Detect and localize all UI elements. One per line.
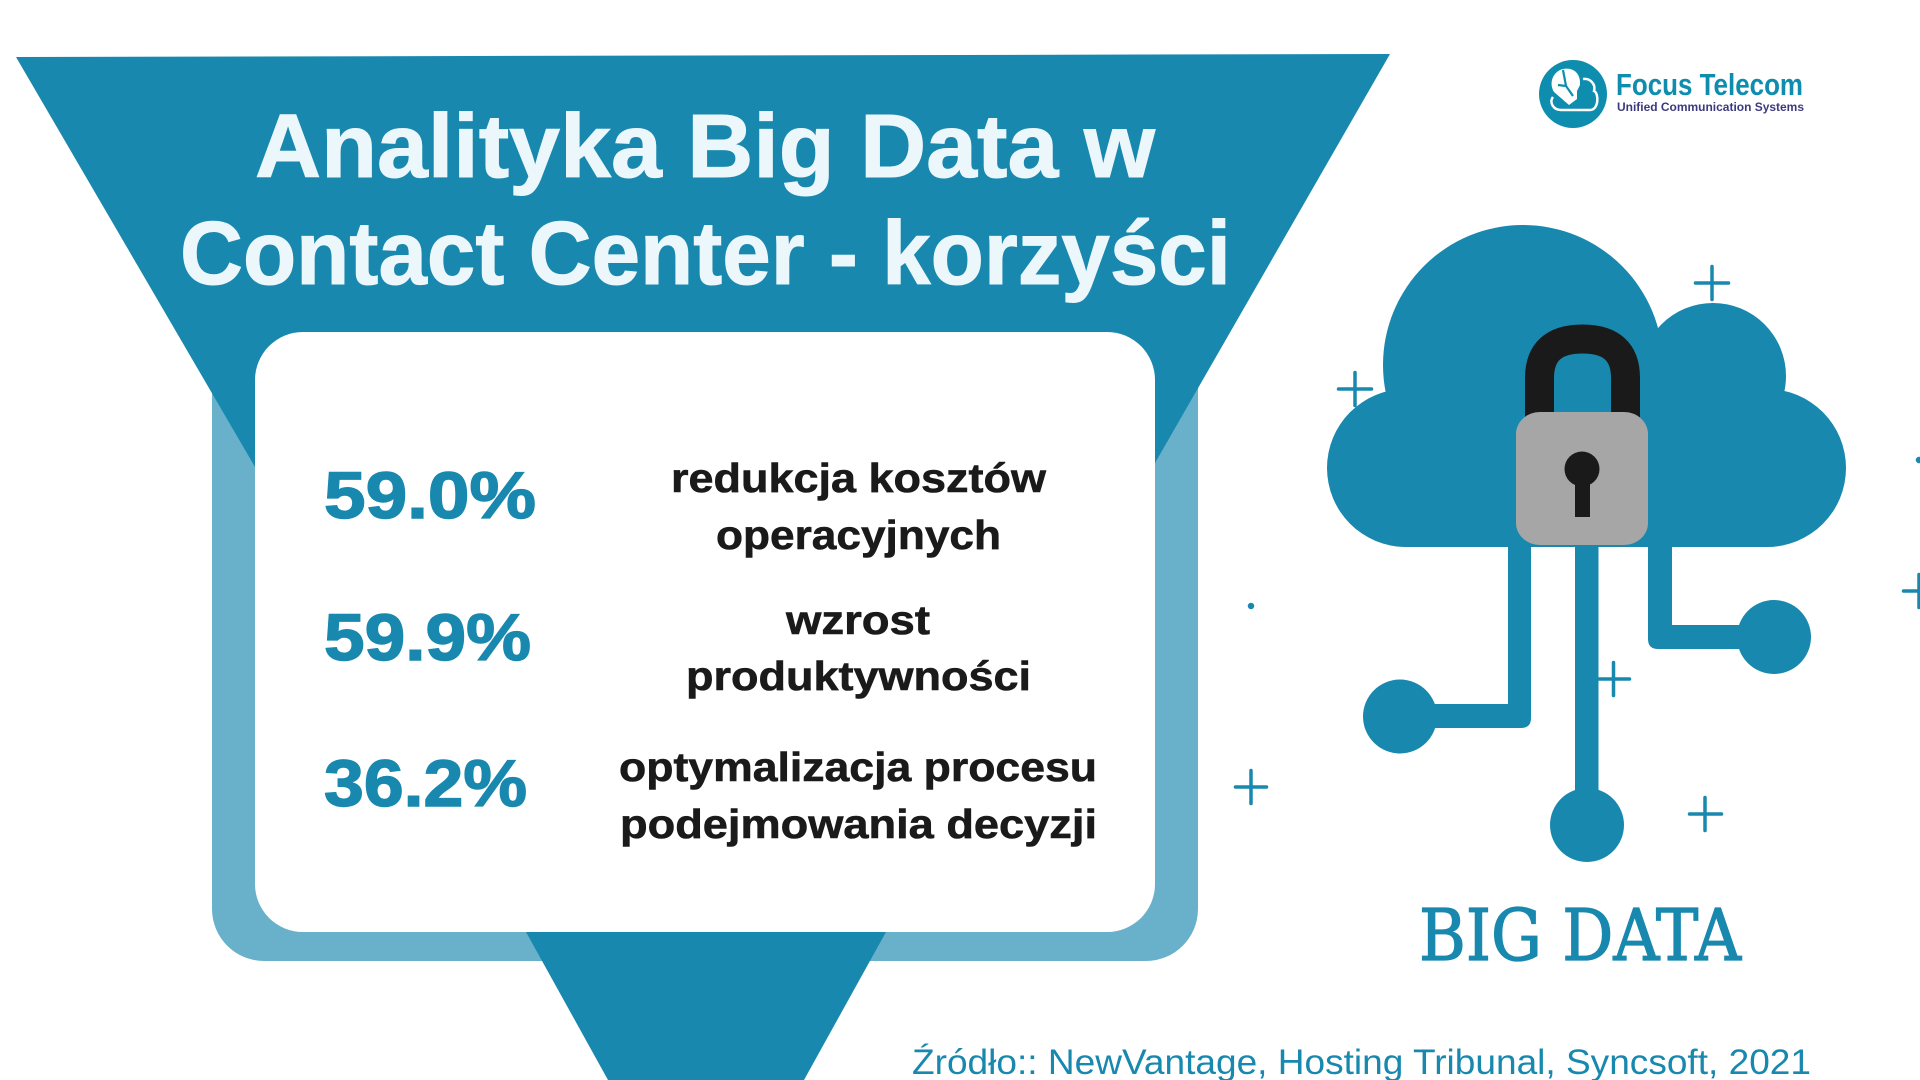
statistic: cost reduction: operacyjnych [716, 512, 1001, 558]
statistic: decision process optimisation [324, 744, 1097, 847]
panel: white statistics card [255, 332, 1155, 932]
statistic: decision process optimisation: podejmowania decyzji [620, 801, 1097, 847]
statistic: cost reduction: 59.0% [324, 458, 536, 532]
icon: padlock [1516, 339, 1648, 545]
panel: light funnel backing [212, 300, 1198, 961]
statistic: decision process optimisation: optymalizacja procesu [619, 744, 1097, 790]
title: Analityka Big Data w [255, 97, 1156, 197]
cloud [1327, 225, 1846, 547]
big data label: BIG DATA [1419, 894, 1742, 977]
statistic: cost reduction [324, 455, 1046, 558]
statistic: productivity growth [324, 597, 1031, 699]
statistic: productivity growth: wzrost [785, 597, 930, 643]
title: Contact Center - korzyści [180, 204, 1231, 304]
statistic: cost reduction: redukcja kosztów [671, 455, 1046, 501]
padlock body [1516, 412, 1648, 545]
statistic: productivity growth: 59.9% [324, 600, 531, 674]
title [180, 97, 1231, 304]
funnel triangle [16, 54, 1390, 1080]
icon: cloud with circuit legs [1327, 225, 1846, 862]
statistic: decision process optimisation: 36.2% [324, 746, 527, 820]
padlock shackle [1540, 339, 1626, 425]
padlock keyhole [1564, 452, 1600, 517]
logo: Focus Telecom [1539, 60, 1804, 128]
centre circuit leg [1550, 540, 1624, 862]
statistic: productivity growth: produktywności [686, 653, 1031, 699]
logo icon [1539, 60, 1607, 128]
logo tagline: Unified Communication Systems [1617, 102, 1804, 114]
right circuit leg [1648, 540, 1811, 674]
logo wordmark: Focus Telecom [1616, 67, 1803, 102]
left circuit leg [1363, 540, 1531, 754]
decorative sparkles [1236, 266, 1920, 830]
